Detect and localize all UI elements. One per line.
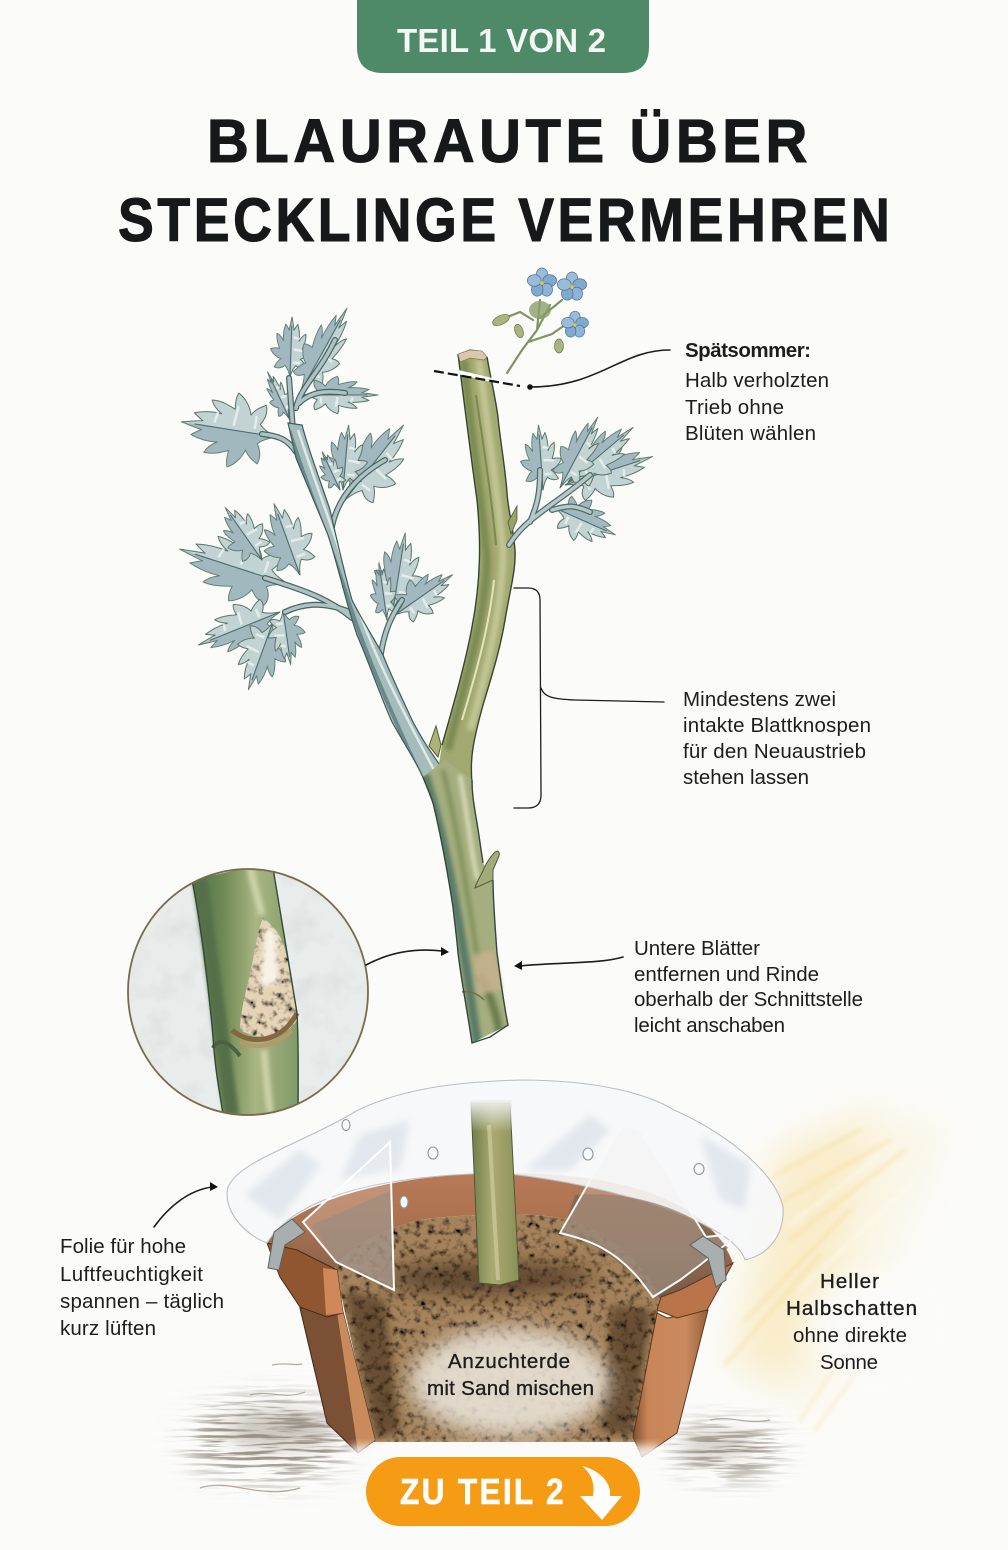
film shading	[245, 1115, 750, 1220]
left pot wall	[267, 1243, 375, 1453]
callout: Folie: Luftfeuchtigkeit	[60, 1263, 203, 1286]
magnifier circle: scraped bark	[128, 862, 368, 1120]
leaves: lower left cluster	[169, 495, 324, 698]
grey-blue side branch	[262, 340, 447, 785]
fade at pot base	[350, 1445, 660, 1466]
title	[118, 107, 890, 255]
soil seen through right flap	[562, 1194, 728, 1295]
main olive stem	[429, 349, 515, 783]
callout: Spätsommer: Trieb ohne	[685, 396, 784, 419]
callout: Halbschatten: Heller	[820, 1270, 879, 1293]
callout: Folie	[60, 1235, 224, 1340]
callout: Blattknospen: stehen lassen	[683, 766, 809, 789]
callout: Untere Blätter: entfernen und Rinde	[634, 963, 819, 986]
sand patch	[410, 1328, 610, 1436]
dark soil at stem base	[385, 1262, 595, 1294]
callout: Spätsommer	[685, 339, 829, 445]
bracket: leaf buds	[514, 588, 664, 808]
arrow: remove leaves callout	[514, 957, 623, 970]
right side branch with leaves	[508, 409, 661, 555]
badge: Teil 1 von 2: TEIL 1 VON 2	[397, 22, 606, 59]
arrow: circle to stem	[366, 947, 449, 965]
leaves: middle cluster	[311, 407, 427, 518]
callout: Spätsommer: Halb verholzten	[685, 369, 829, 392]
callout: Anzuchterde: mit Sand mischen	[427, 1377, 594, 1400]
title: STECKLINGE VERMEHREN	[118, 187, 890, 255]
dark soil along left wall	[345, 1290, 400, 1440]
pot back wall	[267, 1173, 733, 1300]
callout: Untere Blätter: oberhalb der Schnittstelle	[634, 988, 863, 1011]
left film flap	[303, 1142, 394, 1290]
callout: Blattknospen	[683, 688, 871, 789]
callout: Spätsommer: Blüten wählen	[685, 422, 816, 445]
dark soil along right wall	[600, 1305, 652, 1436]
ground shadow	[185, 1364, 783, 1492]
callout: Folie: kurz lüften	[60, 1317, 156, 1340]
callout: Folie: Folie für hohe	[60, 1235, 186, 1258]
callout: Blattknospen: für den Neuaustrieb	[683, 740, 866, 763]
callout: Untere Blätter: leicht anschaben	[634, 1014, 785, 1037]
icon: flower sprig	[491, 268, 588, 373]
callout: Halbschatten: Sonne	[820, 1351, 878, 1374]
callout: Halbschatten: ohne direkte	[793, 1324, 907, 1347]
connector: film callout	[154, 1182, 218, 1227]
soil seen through left flap	[312, 1190, 394, 1288]
sun rays: light glow	[725, 1110, 950, 1430]
right pot wall	[633, 1263, 733, 1457]
callout: Anzuchterde: Anzuchterde	[448, 1350, 570, 1373]
callout: Untere Blätter: Untere Blätter	[634, 937, 760, 960]
title: BLAURAUTE ÜBER	[207, 107, 807, 175]
callout: Halbschatten: Halbschatten	[786, 1297, 917, 1320]
right film flap	[560, 1125, 740, 1297]
right clip	[690, 1236, 726, 1287]
cut line marker	[434, 371, 520, 386]
callout: Folie: spannen – täglich	[60, 1290, 224, 1313]
illustration: cutting with leaves	[169, 268, 661, 1045]
callout: Spätsommer: Spätsommer:	[685, 339, 811, 362]
connector: late summer callout	[527, 350, 670, 390]
stem in the pot	[470, 1100, 519, 1285]
soil mix	[335, 1214, 660, 1442]
lower stem with scraped bark	[423, 760, 508, 1045]
button: Zu Teil 2	[366, 1457, 640, 1526]
leaves: upper left cluster	[175, 298, 378, 474]
button: Zu Teil 2: ZU TEIL 2	[400, 1472, 564, 1512]
left clip	[268, 1219, 305, 1270]
leaves: inner lower cluster	[366, 529, 464, 632]
droplets	[342, 1120, 704, 1208]
callout: Blattknospen: intakte Blattknospen	[683, 714, 871, 737]
callout: Untere Blätter	[634, 937, 863, 1037]
plastic film cover	[227, 1080, 783, 1297]
badge: Teil 1 von 2	[357, 0, 649, 73]
icon: curved arrow	[580, 1466, 622, 1520]
pot: terracotta pot section	[267, 1173, 733, 1466]
callout: Blattknospen: Mindestens zwei	[683, 688, 836, 711]
callout: Anzuchterde	[427, 1350, 594, 1400]
callout: Halbschatten	[786, 1270, 917, 1374]
